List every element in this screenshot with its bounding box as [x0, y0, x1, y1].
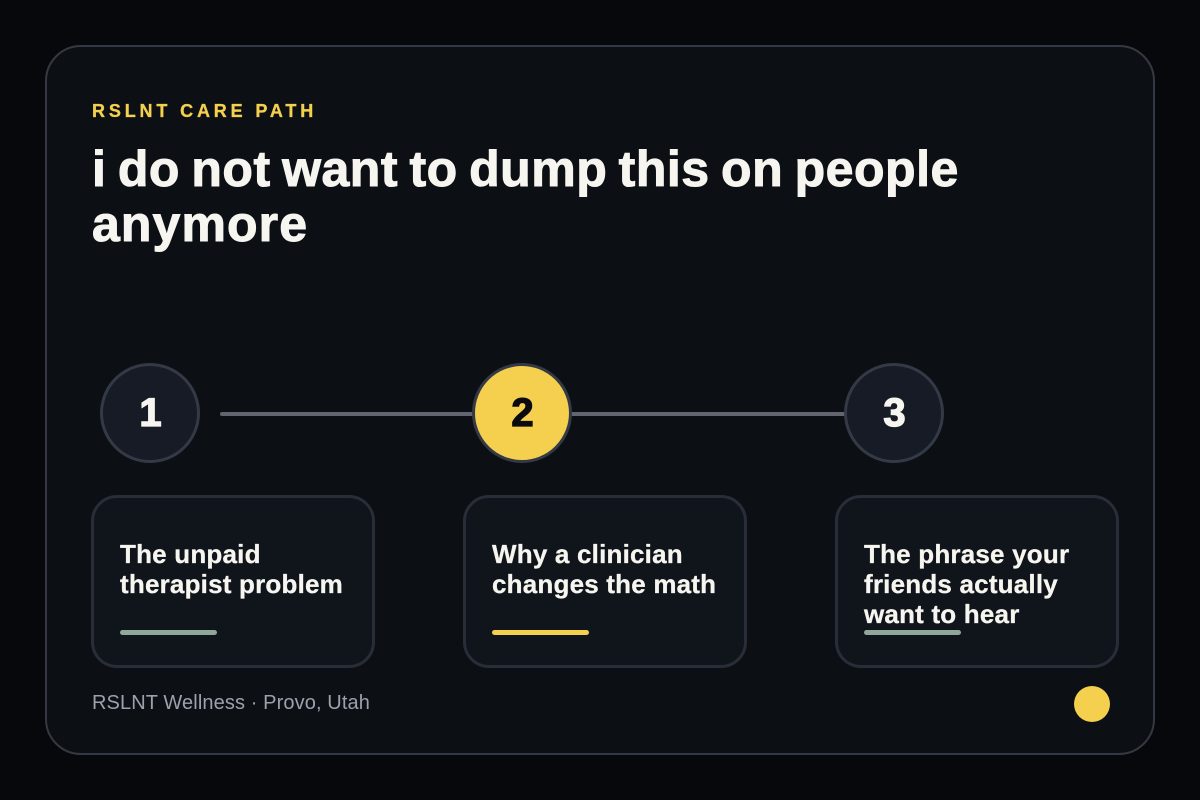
- card 2 accent bar: [492, 630, 589, 635]
- card 1 text: The unpaid: [120, 539, 261, 569]
- footer text: RSLNT Wellness · Provo, Utah: [92, 692, 370, 714]
- card 3 text: want to hear: [864, 599, 1020, 629]
- card 2 text: Why a clinician: [492, 539, 683, 569]
- card 1 text: [120, 539, 343, 599]
- panel: step 1 card: [91, 495, 375, 668]
- card 1 accent bar: [120, 630, 217, 635]
- title: i do not want to dump this on people: [92, 141, 959, 197]
- connector: step 2 to step 3: [568, 412, 848, 416]
- step circle 2 (active): [472, 363, 572, 463]
- step circle 3: 3: [883, 391, 906, 435]
- step circle 1: 1: [139, 391, 162, 435]
- step circle 2 (active): 2: [511, 391, 534, 435]
- step circle 1: [100, 363, 200, 463]
- card 1 text: therapist problem: [120, 569, 343, 599]
- panel: step 2 card: [463, 495, 747, 668]
- step circle 3: [844, 363, 944, 463]
- title: [92, 141, 959, 252]
- icon: yellow dot: [1074, 686, 1110, 722]
- card 3 accent bar: [864, 630, 961, 635]
- card 2 text: changes the math: [492, 569, 716, 599]
- card 3 text: friends actually: [864, 569, 1058, 599]
- panel: step 3 card: [835, 495, 1119, 668]
- card 3 text: [864, 539, 1069, 629]
- eyebrow label: RSLNT CARE PATH: [92, 101, 317, 121]
- title: anymore: [92, 196, 308, 252]
- card 2 text: [492, 539, 716, 599]
- connector: step 1 to step 2: [220, 412, 476, 416]
- card 3 text: The phrase your: [864, 539, 1069, 569]
